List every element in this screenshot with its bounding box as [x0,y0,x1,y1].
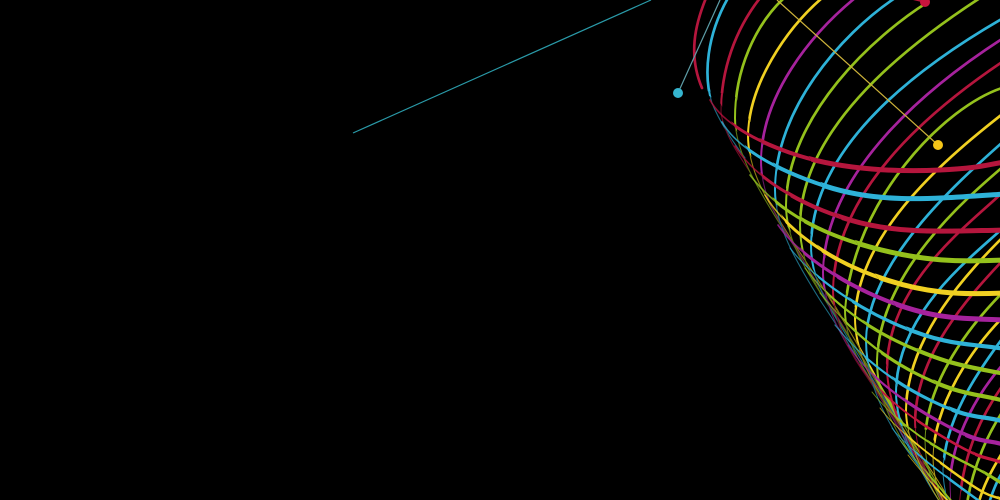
illustration: colourful funnel on black background [352,0,1000,500]
cyan pointer with dot [673,0,720,98]
funnel: longitudinal coloured lines [694,0,1000,500]
crimson pointer with dot [912,0,930,7]
yellow pointer with dot [777,0,943,150]
funnel: horizontal coloured rings [710,100,1000,500]
diagonal teal line [353,0,651,133]
